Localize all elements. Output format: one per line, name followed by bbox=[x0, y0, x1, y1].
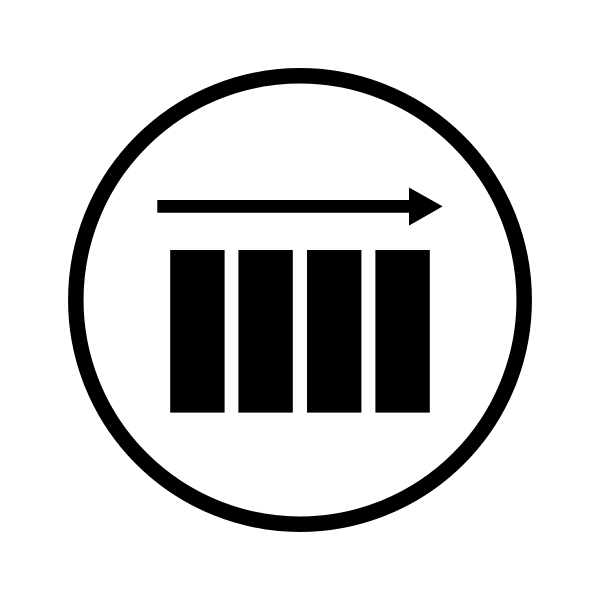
circle outline bbox=[76, 76, 524, 524]
four vertical bars bbox=[170, 250, 430, 413]
arrow pointing right bbox=[157, 188, 443, 226]
